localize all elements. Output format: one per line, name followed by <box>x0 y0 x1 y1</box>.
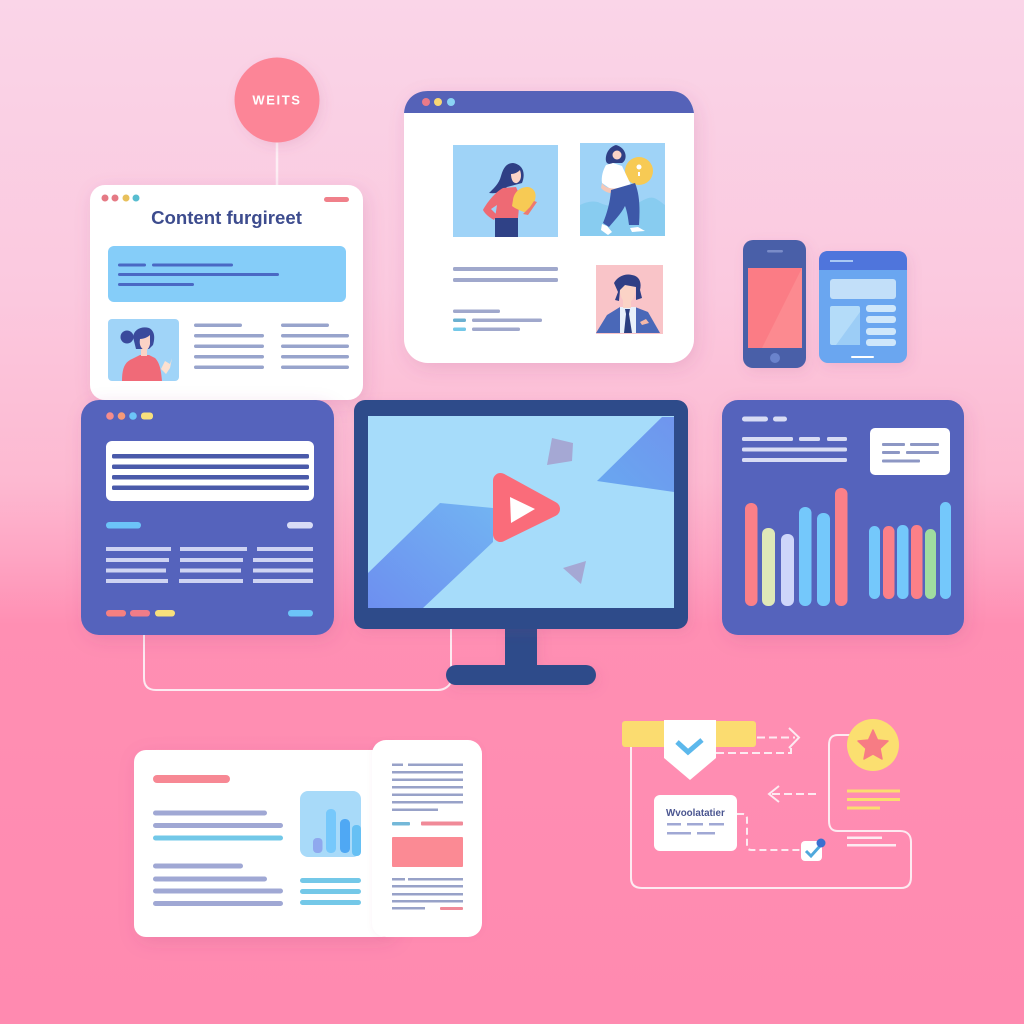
icon: play button <box>500 480 552 534</box>
panel: dark bar chart dashboard <box>722 400 964 635</box>
illustration: person with lightbulb badge <box>580 143 665 236</box>
monitor stand <box>446 625 596 685</box>
monitor with video <box>354 400 688 685</box>
video screen <box>368 416 674 608</box>
text columns <box>194 324 349 369</box>
blue text banner <box>108 246 346 302</box>
side page text <box>392 764 463 910</box>
headline box <box>106 441 314 501</box>
badge: WEITS <box>234 58 320 142</box>
side page accents <box>392 822 463 910</box>
text lines <box>453 267 558 331</box>
illustration: woman with folder <box>453 145 558 237</box>
header bar <box>404 91 694 113</box>
panel: dark article window <box>81 400 334 635</box>
card heading: Content furgireet <box>151 207 302 228</box>
window dots <box>102 194 140 202</box>
text header <box>742 416 847 462</box>
body text lines <box>153 810 283 906</box>
icon: tablet <box>819 251 907 363</box>
panel: report document <box>134 740 482 937</box>
callout box <box>870 428 950 475</box>
workflow diagram <box>622 719 911 888</box>
side page <box>372 740 482 937</box>
illustration: man in suit <box>596 265 663 334</box>
bar chart: right group <box>869 502 951 599</box>
label box: Wvoolatatier <box>666 808 725 819</box>
left blue shape <box>368 503 493 608</box>
text columns <box>106 547 313 583</box>
checkbox with badge <box>801 838 826 861</box>
red tab <box>324 197 349 202</box>
dashed arrow right <box>716 728 799 753</box>
workflow outline <box>631 735 911 888</box>
mini bar chart <box>300 791 361 857</box>
small triangle shape <box>563 561 586 584</box>
illustration: woman gesturing <box>108 319 179 381</box>
connector: left panel to monitor <box>144 625 451 690</box>
connector: circle badge to card <box>276 140 278 187</box>
teal lines <box>300 878 361 905</box>
icon: phone <box>743 240 806 368</box>
window controls <box>106 412 153 420</box>
panel: content card <box>90 185 363 400</box>
label pills <box>106 522 313 528</box>
header dots <box>422 98 455 106</box>
shield with check <box>664 720 716 780</box>
yellow text lines <box>847 790 900 810</box>
monitor frame <box>354 400 688 629</box>
yellow banner <box>622 721 756 747</box>
report title bar <box>153 775 230 783</box>
dashed arrow left <box>769 786 816 802</box>
white text lines <box>847 836 896 846</box>
badge: WEITS: WEITS <box>252 92 302 108</box>
label box <box>654 795 737 851</box>
bar chart: left group <box>745 488 848 606</box>
right blue shape <box>597 417 674 492</box>
panel: gallery browser window <box>404 91 694 363</box>
dashed connector <box>737 814 801 850</box>
footer pills <box>106 610 313 616</box>
icon: star badge <box>847 719 899 771</box>
small kite shape <box>547 438 573 465</box>
